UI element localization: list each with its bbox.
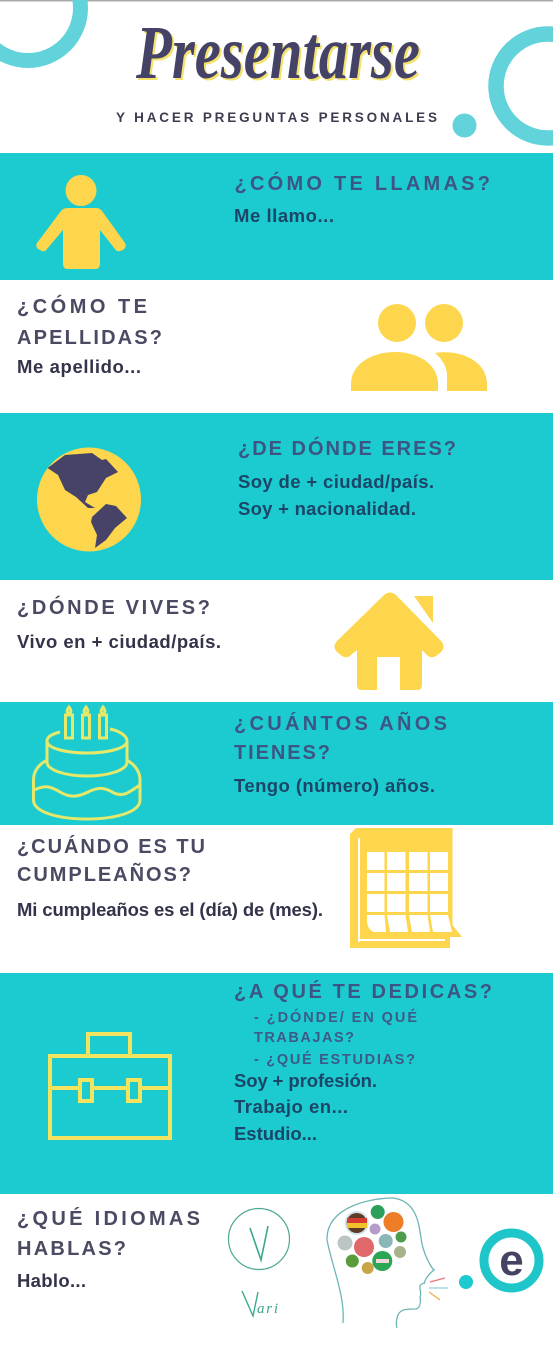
- decorative ring right: [496, 34, 553, 138]
- icon: person: [36, 175, 126, 269]
- decorative dot: [459, 1275, 473, 1289]
- answer text: Vivo en + ciudad/país.: [17, 631, 221, 652]
- panel: cuántos años tienes: [0, 702, 553, 825]
- icon: house: [334, 592, 444, 690]
- answer text: Soy + nacionalidad.: [238, 498, 416, 519]
- panel: a qué te dedicas: [0, 973, 553, 1194]
- panel: header: [0, 0, 553, 138]
- answer text: Soy + profesión.: [234, 1070, 377, 1091]
- heading: ¿CÓMO TE LLAMAS?: [234, 171, 490, 195]
- logo: Vari: [228, 1208, 290, 1317]
- logo: e: e: [499, 1236, 524, 1285]
- heading: ¿CUÁNTOS AÑOS: [234, 712, 447, 735]
- logo: Vari: ari: [257, 1301, 278, 1317]
- answer text: Trabajo en...: [234, 1096, 348, 1117]
- answer text: Me llamo...: [234, 205, 334, 226]
- icon: birthday cake: [34, 707, 140, 819]
- heading: [17, 294, 162, 349]
- icon: globe: [37, 448, 141, 552]
- heading: ¿QUÉ IDIOMAS: [17, 1207, 200, 1230]
- subtitle: Y HACER PREGUNTAS PERSONALES: [116, 110, 437, 125]
- decorative ring top left: [0, 0, 80, 60]
- answer text: Me apellido...: [17, 356, 141, 377]
- heading: [17, 1207, 200, 1260]
- answer text: Mi cumpleaños es el (día) de (mes).: [17, 899, 323, 920]
- panel: cómo te apellidas: [17, 294, 487, 391]
- answer text: Tengo (número) años.: [234, 775, 435, 796]
- heading: [234, 712, 447, 764]
- answer text: [238, 471, 434, 519]
- follow-up questions: - ¿DÓNDE/ EN QUÉ: [254, 1008, 417, 1026]
- follow-up questions: TRABAJAS?: [254, 1030, 354, 1046]
- follow-up questions: - ¿QUÉ ESTUDIAS?: [254, 1051, 415, 1068]
- panel: cuándo es tu cumpleaños: [17, 828, 462, 948]
- heading: CUMPLEAÑOS?: [17, 863, 191, 886]
- icon: briefcase: [50, 1034, 170, 1138]
- panel: de dónde eres: [0, 413, 553, 580]
- answer text: [234, 1070, 377, 1144]
- heading: [17, 835, 205, 886]
- answer text: Estudio...: [234, 1123, 317, 1144]
- panel: qué idiomas hablas: [17, 1198, 539, 1328]
- heading: TIENES?: [234, 742, 330, 764]
- answer text: Hablo...: [17, 1270, 86, 1291]
- logo: e: [484, 1233, 539, 1288]
- heading: HABLAS?: [17, 1238, 126, 1260]
- panel: cómo te llamas: [0, 153, 553, 280]
- heading: ¿A QUÉ TE DEDICAS?: [234, 980, 492, 1003]
- heading: APELLIDAS?: [17, 327, 162, 349]
- answer text: Soy de + ciudad/país.: [238, 471, 434, 492]
- heading: ¿CUÁNDO ES TU: [17, 835, 205, 858]
- icon: two people: [351, 304, 487, 391]
- panel: dónde vives: [17, 592, 444, 690]
- title: Presentarse: [135, 11, 420, 95]
- heading: ¿CÓMO TE: [17, 294, 147, 318]
- decorative dot: [452, 114, 476, 138]
- icon: calendar: [350, 828, 462, 948]
- heading: ¿DÓNDE VIVES?: [17, 595, 210, 619]
- title: Presentarse: [137, 13, 422, 97]
- icon: head with language flags: [327, 1198, 448, 1328]
- heading: ¿DE DÓNDE ERES?: [238, 436, 456, 460]
- follow-up questions: [254, 1008, 417, 1068]
